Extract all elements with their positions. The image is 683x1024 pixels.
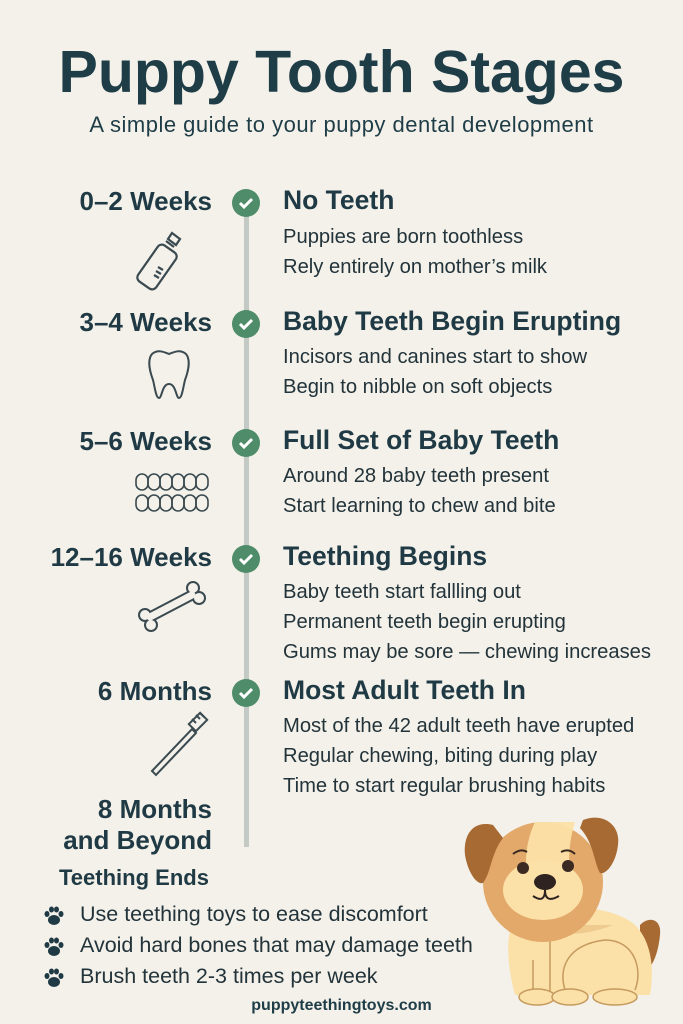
text: Most of the 42 adult teeth have erupted <box>283 715 634 737</box>
text: Start learning to chew and bite <box>283 495 556 517</box>
text: Begin to nibble on soft objects <box>283 376 552 398</box>
label: 12–16 Weeks <box>51 542 212 572</box>
icon: bone <box>138 581 206 632</box>
text: Incisors and canines start to show <box>283 346 587 368</box>
text: Rely entirely on mother’s milk <box>283 256 547 278</box>
heading: No Teeth <box>283 185 394 215</box>
tips list <box>44 902 473 988</box>
text: Time to start regular brushing habits <box>283 775 605 797</box>
timeline line <box>244 205 249 847</box>
teething ends heading: Teething Ends <box>59 865 209 890</box>
heading: Baby Teeth Begin Erupting <box>283 306 621 336</box>
final stage label <box>63 794 212 855</box>
stage 1 <box>79 185 547 290</box>
icon: toothbrush <box>150 711 208 776</box>
title: Puppy Tooth Stages <box>58 39 624 105</box>
heading: Teething Begins <box>283 541 487 571</box>
illustration: puppy <box>464 818 660 1006</box>
stage 3 <box>79 425 559 517</box>
text: Regular chewing, biting during play <box>283 745 597 767</box>
footer url: puppyteethingtoys.com <box>251 997 432 1014</box>
tip 2: Avoid hard bones that may damage teeth <box>80 933 473 957</box>
final stage label: 8 Months <box>98 794 212 824</box>
text: Baby teeth start fallling out <box>283 581 521 603</box>
final stage label: and Beyond <box>63 825 212 855</box>
tip 3: Brush teeth 2-3 times per week <box>80 964 378 988</box>
check icon <box>232 429 260 457</box>
stage 5 <box>98 675 634 797</box>
heading: Full Set of Baby Teeth <box>283 425 559 455</box>
stage 4 <box>51 541 651 663</box>
icon: teeth rows <box>135 473 209 512</box>
text: Permanent teeth begin erupting <box>283 611 566 633</box>
text <box>283 465 556 517</box>
label: 3–4 Weeks <box>79 307 212 337</box>
text: Gums may be sore — chewing increases <box>283 641 651 663</box>
label: 6 Months <box>98 676 212 706</box>
text <box>283 715 634 797</box>
tip 1: Use teething toys to ease discomfort <box>80 902 428 926</box>
check icon <box>232 545 260 573</box>
text <box>283 581 651 663</box>
subtitle: A simple guide to your puppy dental development <box>89 112 594 137</box>
check icon <box>232 679 260 707</box>
label: 5–6 Weeks <box>79 426 212 456</box>
text <box>283 226 547 278</box>
check icon <box>232 310 260 338</box>
icon: tooth <box>148 350 190 399</box>
check icon <box>232 189 260 217</box>
text <box>283 346 588 398</box>
text: Around 28 baby teeth present <box>283 465 549 487</box>
icon: bottle <box>136 231 182 290</box>
heading: Most Adult Teeth In <box>283 675 526 705</box>
text: Puppies are born toothless <box>283 226 523 248</box>
stage 2 <box>79 306 621 399</box>
label: 0-2 weeks: 0–2 Weeks <box>79 186 212 216</box>
